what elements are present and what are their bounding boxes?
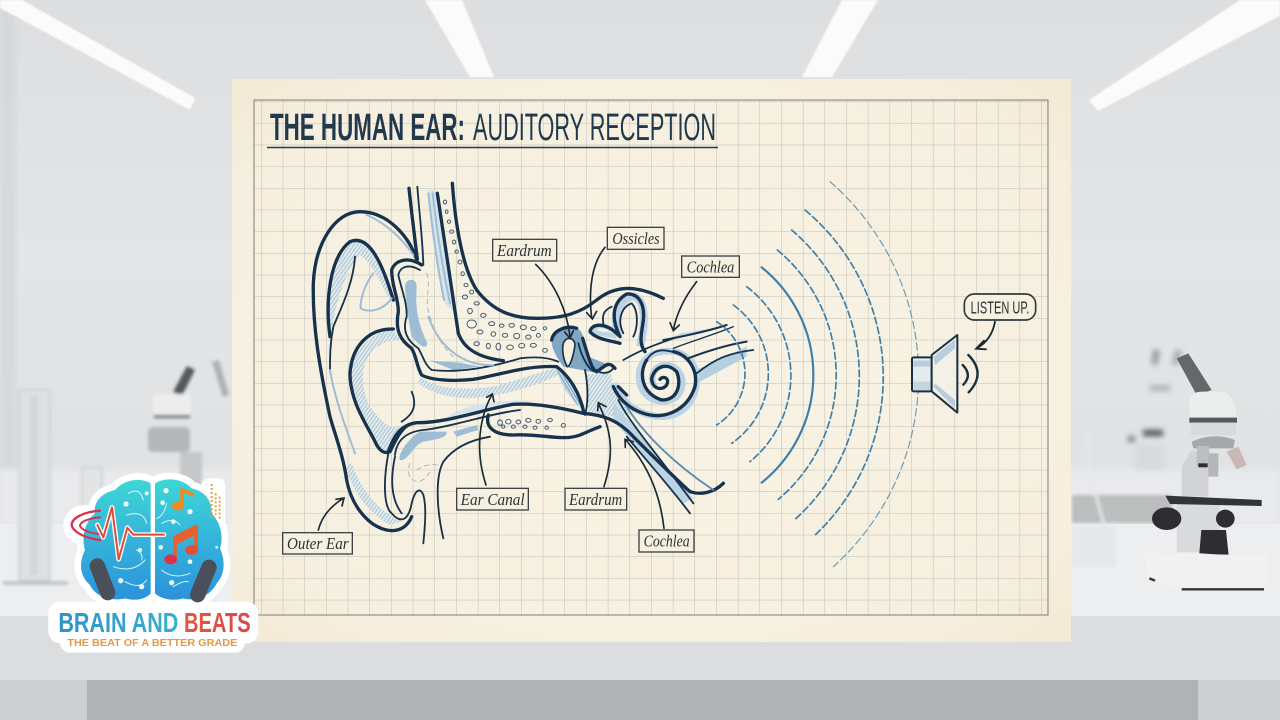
sticker backing — [55, 479, 252, 646]
equalizer — [212, 484, 220, 520]
label: Ossicles — [587, 227, 664, 319]
callout: listen up: LISTEN UP. — [971, 298, 1029, 318]
label: Outer Ear: Outer Ear — [287, 534, 349, 553]
paper sheet — [232, 79, 1071, 642]
temporal walls — [409, 183, 663, 365]
brain lobes — [81, 479, 224, 600]
label: Eardrum lower: Eardrum — [568, 490, 622, 509]
label: Eardrum top: Eardrum — [496, 241, 552, 260]
brain circuit marks — [113, 491, 210, 587]
label: Outer Ear — [283, 498, 352, 554]
label: Ear Canal: Ear Canal — [460, 490, 525, 509]
callout: listen up — [964, 294, 1036, 349]
lower tissue fold — [488, 415, 600, 438]
logo: Brain and Beats: BEATS — [184, 607, 251, 638]
bone speckles — [443, 200, 565, 429]
label: Ear Canal — [457, 394, 528, 510]
faint soft-tissue marks — [408, 273, 453, 481]
label: Ossicles: Ossicles — [612, 229, 660, 248]
speaker icon — [912, 335, 978, 413]
sound waves — [717, 182, 919, 567]
cochlea spiral — [613, 350, 697, 417]
flask right — [1072, 432, 1116, 565]
blurred microscope left — [148, 360, 229, 492]
glassware left — [3, 390, 102, 583]
label: Cochlea top — [670, 256, 739, 331]
shaded tissue — [329, 190, 747, 525]
title: AUDITORY RECEPTION — [473, 107, 716, 149]
title: THE HUMAN EAR: — [270, 107, 465, 149]
semicircular canals — [590, 294, 673, 360]
tragus and canal lines — [385, 260, 723, 543]
blurred microscope right back — [1128, 350, 1182, 470]
label: Cochlea lower: Cochlea — [644, 532, 690, 551]
ceiling lights — [0, 0, 1280, 111]
label: Cochlea top: Cochlea — [687, 257, 734, 276]
label: Cochlea lower — [625, 439, 694, 552]
auditory nerve — [663, 325, 753, 373]
middle ear bones — [552, 327, 615, 415]
eustachian tube — [618, 400, 713, 513]
logo wordmark: BRAIN AND — [58, 607, 178, 638]
microscope right — [1145, 353, 1267, 591]
logo: Brain and Beats — [55, 479, 252, 649]
outer ear outline — [313, 212, 417, 531]
label: Eardrum top — [493, 239, 573, 338]
ear anatomy drawing — [283, 183, 753, 554]
pulse wave — [72, 507, 164, 559]
music notes — [164, 490, 198, 564]
headphones — [97, 566, 209, 595]
logo tagline: THE BEAT OF A BETTER GRADE — [67, 638, 238, 649]
label: Eardrum lower — [565, 403, 627, 510]
